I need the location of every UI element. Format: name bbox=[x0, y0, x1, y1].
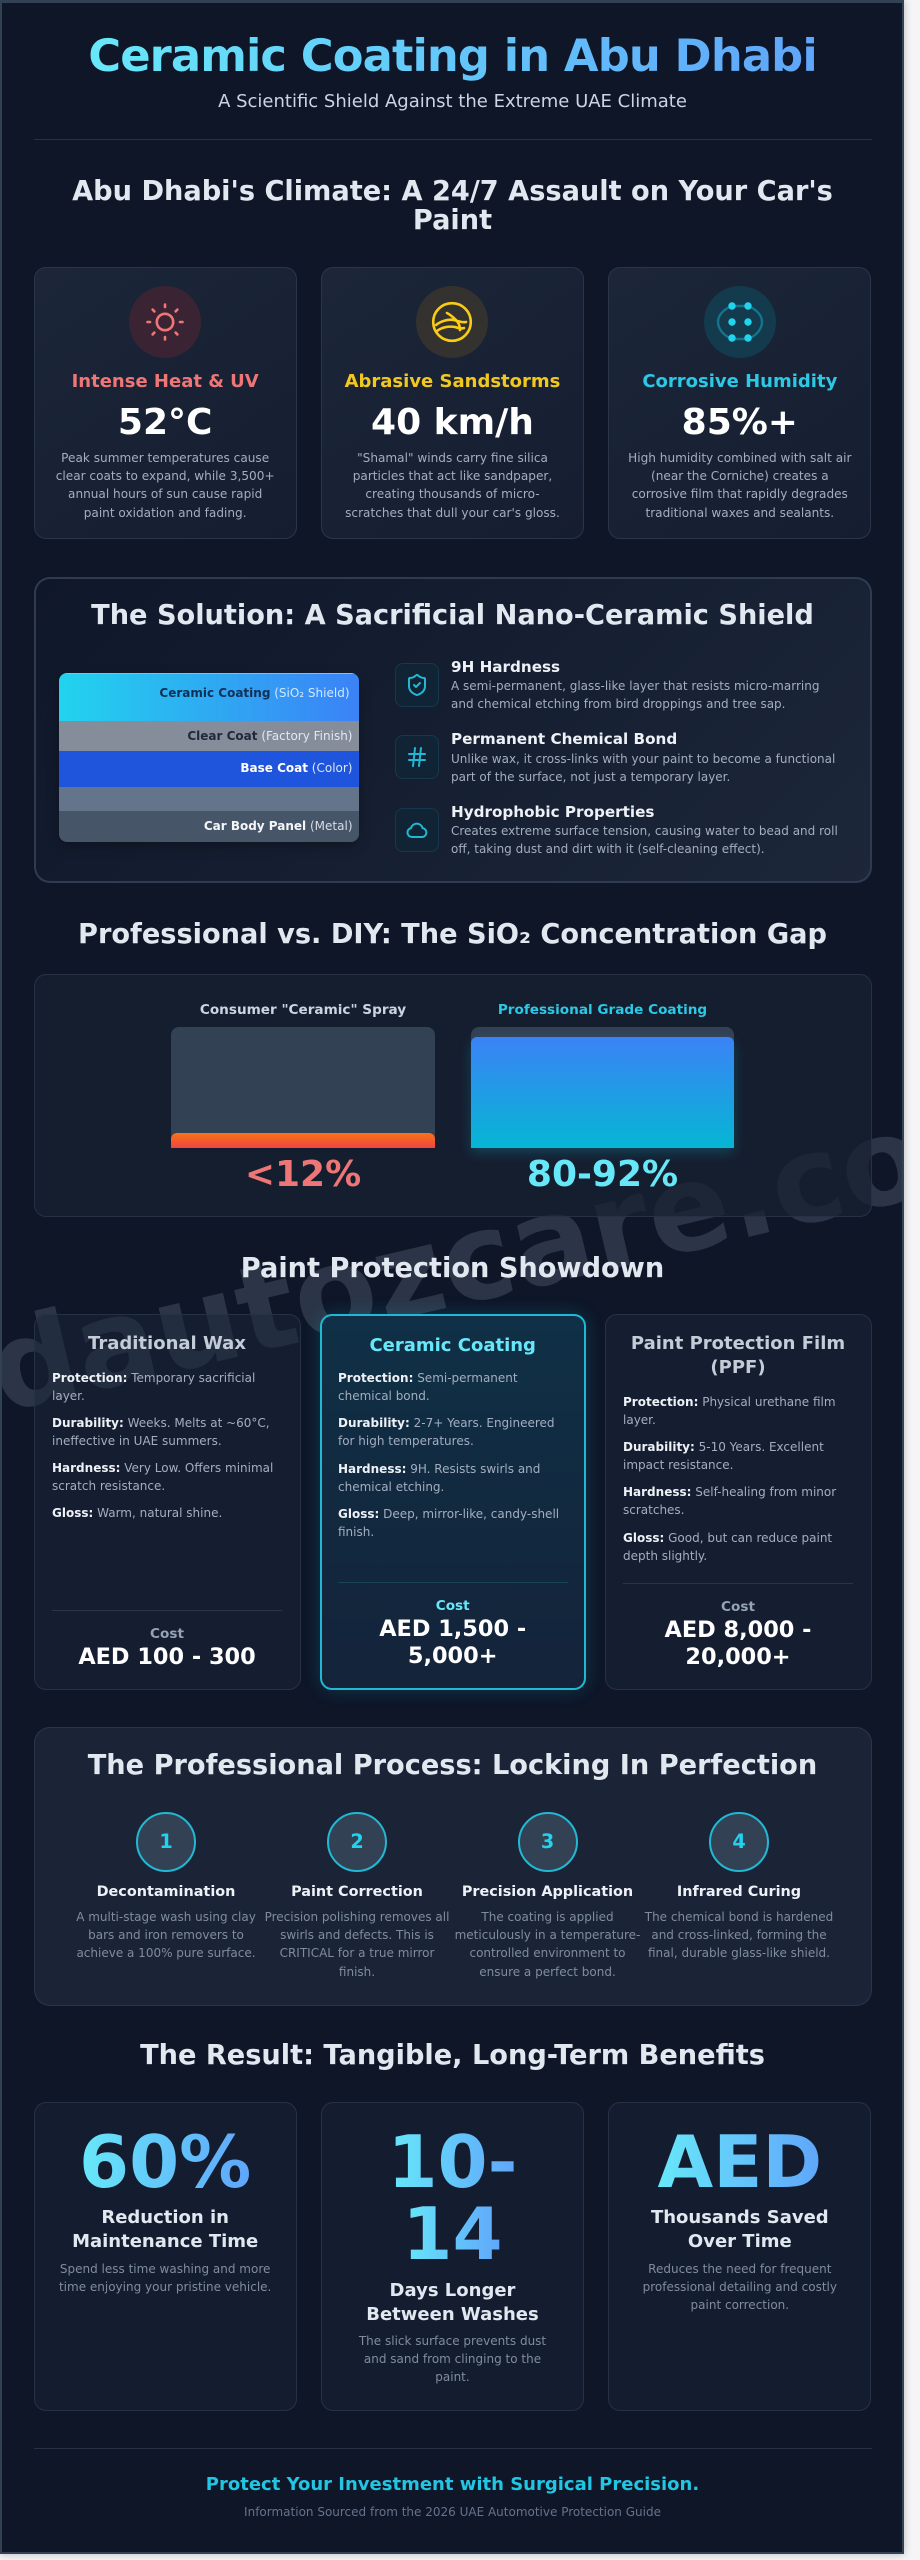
result title bbox=[72, 2207, 258, 2252]
step text bbox=[265, 1910, 449, 1979]
description: "Shamal" winds carry fine silica bbox=[357, 451, 548, 465]
result text bbox=[643, 2262, 837, 2312]
comparison rows: chemical etching. bbox=[338, 1480, 444, 1494]
result title: Thousands Saved bbox=[651, 2207, 829, 2228]
heading: The Professional Process: Locking In Perfection bbox=[88, 1750, 817, 1781]
heading: concentration gap: Professional vs. DIY: The SiO₂ Concentration Gap bbox=[78, 919, 827, 950]
result title: Reduction in bbox=[101, 2207, 229, 2228]
panel: intense heat card bbox=[34, 267, 297, 539]
step number bbox=[709, 1812, 769, 1872]
panel: sandstorms card bbox=[321, 267, 584, 539]
step text: finish. bbox=[339, 1965, 375, 1979]
panel: humidity card bbox=[608, 267, 871, 539]
comparison rows: Hardness: 9H. Resists swirls and bbox=[338, 1462, 540, 1476]
cost value: AED 1,500 - bbox=[379, 1616, 526, 1642]
cost label: Cost bbox=[721, 1599, 755, 1615]
comparison rows: scratch resistance. bbox=[52, 1479, 165, 1493]
step text: CRITICAL for a true mirror bbox=[280, 1946, 434, 1960]
heading: The Solution: A Sacrificial Nano-Ceramic Shield bbox=[91, 600, 814, 631]
footer bbox=[206, 2474, 699, 2519]
comparison rows: Gloss: Warm, natural shine. bbox=[52, 1506, 222, 1520]
cost value bbox=[379, 1616, 526, 1669]
feature text: part of the surface, not just a temporary layer. bbox=[451, 770, 730, 784]
panel: professional process bbox=[34, 1727, 872, 2006]
step 2 bbox=[265, 1812, 449, 1979]
heading: climate bbox=[72, 176, 833, 236]
comparison rows: Durability: 2-7+ Years. Engineered bbox=[338, 1416, 555, 1430]
cost value bbox=[664, 1616, 811, 1670]
icon: wind and sand bbox=[416, 286, 488, 358]
heading: showdown: Paint Protection Showdown bbox=[241, 1253, 664, 1284]
icon: hash bbox=[395, 735, 439, 779]
bar label: consumer: Consumer "Ceramic" Spray bbox=[200, 1002, 406, 1018]
step 4 bbox=[644, 1812, 833, 1960]
cost value: 5,000+ bbox=[408, 1643, 497, 1669]
step title: Paint Correction bbox=[291, 1884, 423, 1900]
big number: AED bbox=[657, 2120, 822, 2204]
comparison rows: finish. bbox=[338, 1525, 374, 1539]
step number bbox=[136, 1812, 196, 1872]
step text: controlled environment to bbox=[469, 1946, 626, 1960]
comparison rows: Hardness: Self-healing from minor bbox=[623, 1485, 836, 1499]
result text: paint. bbox=[435, 2370, 470, 2384]
comparison rows: Gloss: Deep, mirror-like, candy-shell bbox=[338, 1507, 559, 1521]
description: clear coats to expand, while 3,500+ bbox=[56, 469, 275, 483]
step 1 bbox=[76, 1812, 256, 1960]
step number: 3 bbox=[541, 1830, 554, 1853]
feature text bbox=[451, 824, 838, 856]
value: professional: 80-92% bbox=[527, 1154, 678, 1195]
diagram: paint layers: Car Body Panel (Metal) bbox=[204, 819, 352, 833]
comparison rows: Hardness: Very Low. Offers minimal bbox=[52, 1461, 273, 1475]
bar label: professional: Professional Grade Coating bbox=[498, 1002, 707, 1018]
step text: ensure a perfect bond. bbox=[479, 1965, 616, 1979]
step text: swirls and defects. This is bbox=[280, 1928, 434, 1942]
feature text: and chemical etching from bird droppings and tree sap. bbox=[451, 697, 785, 711]
comparison rows: impact resistance. bbox=[623, 1458, 733, 1472]
comparison rows: for high temperatures. bbox=[338, 1434, 474, 1448]
result text: Spend less time washing and more bbox=[60, 2262, 270, 2276]
panel: result maintenance time bbox=[34, 2102, 297, 2411]
result text: Reduces the need for frequent bbox=[648, 2262, 831, 2276]
cost label: Cost bbox=[150, 1626, 184, 1642]
diagram: paint layers bbox=[58, 673, 358, 842]
panel: result savings bbox=[608, 2102, 871, 2411]
step title: Precision Application bbox=[462, 1884, 633, 1900]
panel: the solution bbox=[34, 577, 872, 883]
card heading: Corrosive Humidity bbox=[642, 371, 837, 392]
feature title: 9H Hardness bbox=[451, 658, 560, 676]
panel: ceramic coating bbox=[320, 1314, 586, 1690]
result text: professional detailing and costly bbox=[643, 2280, 837, 2294]
description: creating thousands of micro- bbox=[365, 487, 540, 501]
step text: and cross-linked, forming the bbox=[651, 1928, 827, 1942]
result text bbox=[358, 2334, 546, 2384]
description bbox=[56, 451, 275, 520]
description: (near the Corniche) creates a bbox=[651, 469, 829, 483]
result title: Between Washes bbox=[366, 2304, 539, 2325]
comparison rows: Gloss: Good, but can reduce paint bbox=[623, 1531, 832, 1545]
bar: professional bbox=[471, 1027, 734, 1148]
step text: A multi-stage wash using clay bbox=[76, 1910, 256, 1924]
description: High humidity combined with salt air bbox=[628, 451, 851, 465]
comparison rows: chemical bond. bbox=[338, 1389, 430, 1403]
card heading: Intense Heat & UV bbox=[72, 371, 259, 392]
heading: results: The Result: Tangible, Long-Term Benefits bbox=[140, 2040, 765, 2071]
description bbox=[345, 451, 560, 520]
result text: The slick surface prevents dust bbox=[359, 2334, 546, 2348]
comparison rows: scratches. bbox=[623, 1503, 684, 1517]
description: paint oxidation and fading. bbox=[84, 506, 247, 520]
step text: meticulously in a temperature- bbox=[455, 1928, 640, 1942]
stat: 40 km/h bbox=[371, 402, 534, 442]
call to action: Protect Your Investment with Surgical Precision. bbox=[206, 2474, 699, 2495]
icon: shield bbox=[395, 663, 439, 707]
feature title: Permanent Chemical Bond bbox=[451, 730, 677, 748]
comparison rows bbox=[623, 1395, 836, 1563]
panel: paint protection film bbox=[604, 1314, 872, 1690]
description: corrosive film that rapidly degrades bbox=[632, 487, 848, 501]
cost value: 20,000+ bbox=[685, 1644, 791, 1670]
card heading: Abrasive Sandstorms bbox=[345, 371, 560, 392]
result title bbox=[651, 2207, 829, 2252]
result title: Days Longer bbox=[390, 2280, 515, 2301]
card title: Ceramic Coating bbox=[369, 1335, 536, 1356]
cost value: AED 100 - 300 bbox=[78, 1644, 256, 1670]
card title: (PPF) bbox=[710, 1357, 766, 1378]
comparison rows bbox=[338, 1371, 559, 1539]
big number: 10- bbox=[387, 2120, 518, 2204]
big number: 60% bbox=[79, 2120, 251, 2204]
diagram: paint layers: Base Coat (Color) bbox=[240, 761, 352, 775]
description: particles that act like sandpaper, bbox=[353, 469, 552, 483]
result text: and sand from clinging to the bbox=[364, 2352, 541, 2366]
icon: sun bbox=[129, 286, 201, 358]
step text bbox=[644, 1910, 833, 1960]
result title: Maintenance Time bbox=[72, 2231, 258, 2252]
comparison rows: layer. bbox=[52, 1389, 85, 1403]
result title bbox=[366, 2280, 539, 2325]
stat: 52°C bbox=[118, 402, 212, 442]
feature text: off, taking dust and dirt with it (self-cleaning effect). bbox=[451, 842, 765, 856]
card title bbox=[631, 1333, 845, 1378]
card title: Paint Protection Film bbox=[631, 1333, 845, 1354]
step text bbox=[76, 1910, 256, 1960]
icon: molecules bbox=[704, 286, 776, 358]
bar: consumer bbox=[171, 1027, 435, 1148]
step text: final, durable glass-like shield. bbox=[648, 1946, 830, 1960]
stat: 85%+ bbox=[682, 402, 798, 442]
panel: result days longer bbox=[321, 2102, 584, 2411]
comparison rows: layer. bbox=[623, 1413, 656, 1427]
description: annual hours of sun cause rapid bbox=[68, 487, 262, 501]
feature text: Unlike wax, it cross-links with your paint to become a functional bbox=[451, 752, 835, 766]
description: Peak summer temperatures cause bbox=[61, 451, 269, 465]
step title: Decontamination bbox=[97, 1884, 235, 1900]
result text bbox=[59, 2262, 271, 2294]
title: Ceramic Coating in Abu Dhabi bbox=[88, 29, 817, 82]
subtitle: A Scientific Shield Against the Extreme UAE Climate bbox=[218, 91, 687, 112]
step number: 1 bbox=[159, 1830, 173, 1853]
step text: bars and iron removers to bbox=[88, 1928, 244, 1942]
result text: time enjoying your pristine vehicle. bbox=[59, 2280, 271, 2294]
big number bbox=[387, 2120, 518, 2276]
diagram: paint layers: Ceramic Coating (SiO₂ Shield) bbox=[159, 686, 350, 700]
card title: Traditional Wax bbox=[88, 1333, 246, 1354]
step text: Precision polishing removes all bbox=[265, 1910, 449, 1924]
step number: 2 bbox=[350, 1830, 364, 1853]
description: traditional waxes and sealants. bbox=[645, 506, 834, 520]
feature text bbox=[451, 752, 835, 784]
comparison rows: Protection: Semi-permanent bbox=[338, 1371, 518, 1385]
step 3 bbox=[455, 1812, 640, 1979]
step number: 4 bbox=[732, 1830, 746, 1853]
description: scratches that dull your car's gloss. bbox=[345, 506, 560, 520]
cost label: Cost bbox=[436, 1598, 470, 1614]
step text: The coating is applied bbox=[481, 1910, 614, 1924]
comparison rows: ineffective in UAE summers. bbox=[52, 1434, 222, 1448]
diagram: paint layers: Clear Coat (Factory Finish) bbox=[187, 729, 352, 743]
comparison rows: Protection: Temporary sacrificial bbox=[52, 1371, 255, 1385]
header bbox=[88, 29, 817, 112]
comparison rows bbox=[52, 1371, 273, 1520]
big number: 14 bbox=[402, 2192, 503, 2276]
step number bbox=[518, 1812, 578, 1872]
panel: concentration chart bbox=[34, 974, 872, 1217]
feature text: A semi-permanent, glass-like layer that resists micro-marring bbox=[451, 679, 819, 693]
comparison rows: Durability: Weeks. Melts at ~60°C, bbox=[52, 1416, 270, 1430]
step text bbox=[455, 1910, 640, 1979]
step title: Infrared Curing bbox=[677, 1884, 801, 1900]
value: consumer: <12% bbox=[245, 1154, 361, 1195]
step text: The chemical bond is hardened bbox=[645, 1910, 833, 1924]
panel: traditional wax bbox=[34, 1314, 300, 1690]
result text: paint correction. bbox=[691, 2298, 789, 2312]
comparison rows: Durability: 5-10 Years. Excellent bbox=[623, 1440, 824, 1454]
comparison rows: Protection: Physical urethane film bbox=[623, 1395, 836, 1409]
result title: Over Time bbox=[688, 2231, 792, 2252]
step number bbox=[327, 1812, 387, 1872]
heading: climate: Paint bbox=[413, 205, 492, 236]
step text: achieve a 100% pure surface. bbox=[76, 1946, 256, 1960]
heading: climate: Abu Dhabi's Climate: A 24/7 Assault on Your Car's bbox=[72, 176, 833, 207]
cost value: AED 8,000 - bbox=[665, 1616, 811, 1642]
source note: Information Sourced from the 2026 UAE Automotive Protection Guide bbox=[244, 2505, 661, 2519]
feature text bbox=[451, 679, 819, 711]
icon: cloud bbox=[395, 808, 439, 852]
comparison rows: depth slightly. bbox=[623, 1549, 707, 1563]
feature text: Creates extreme surface tension, causing water to bead and roll bbox=[451, 824, 838, 838]
feature title: Hydrophobic Properties bbox=[451, 803, 654, 821]
description bbox=[628, 451, 852, 520]
